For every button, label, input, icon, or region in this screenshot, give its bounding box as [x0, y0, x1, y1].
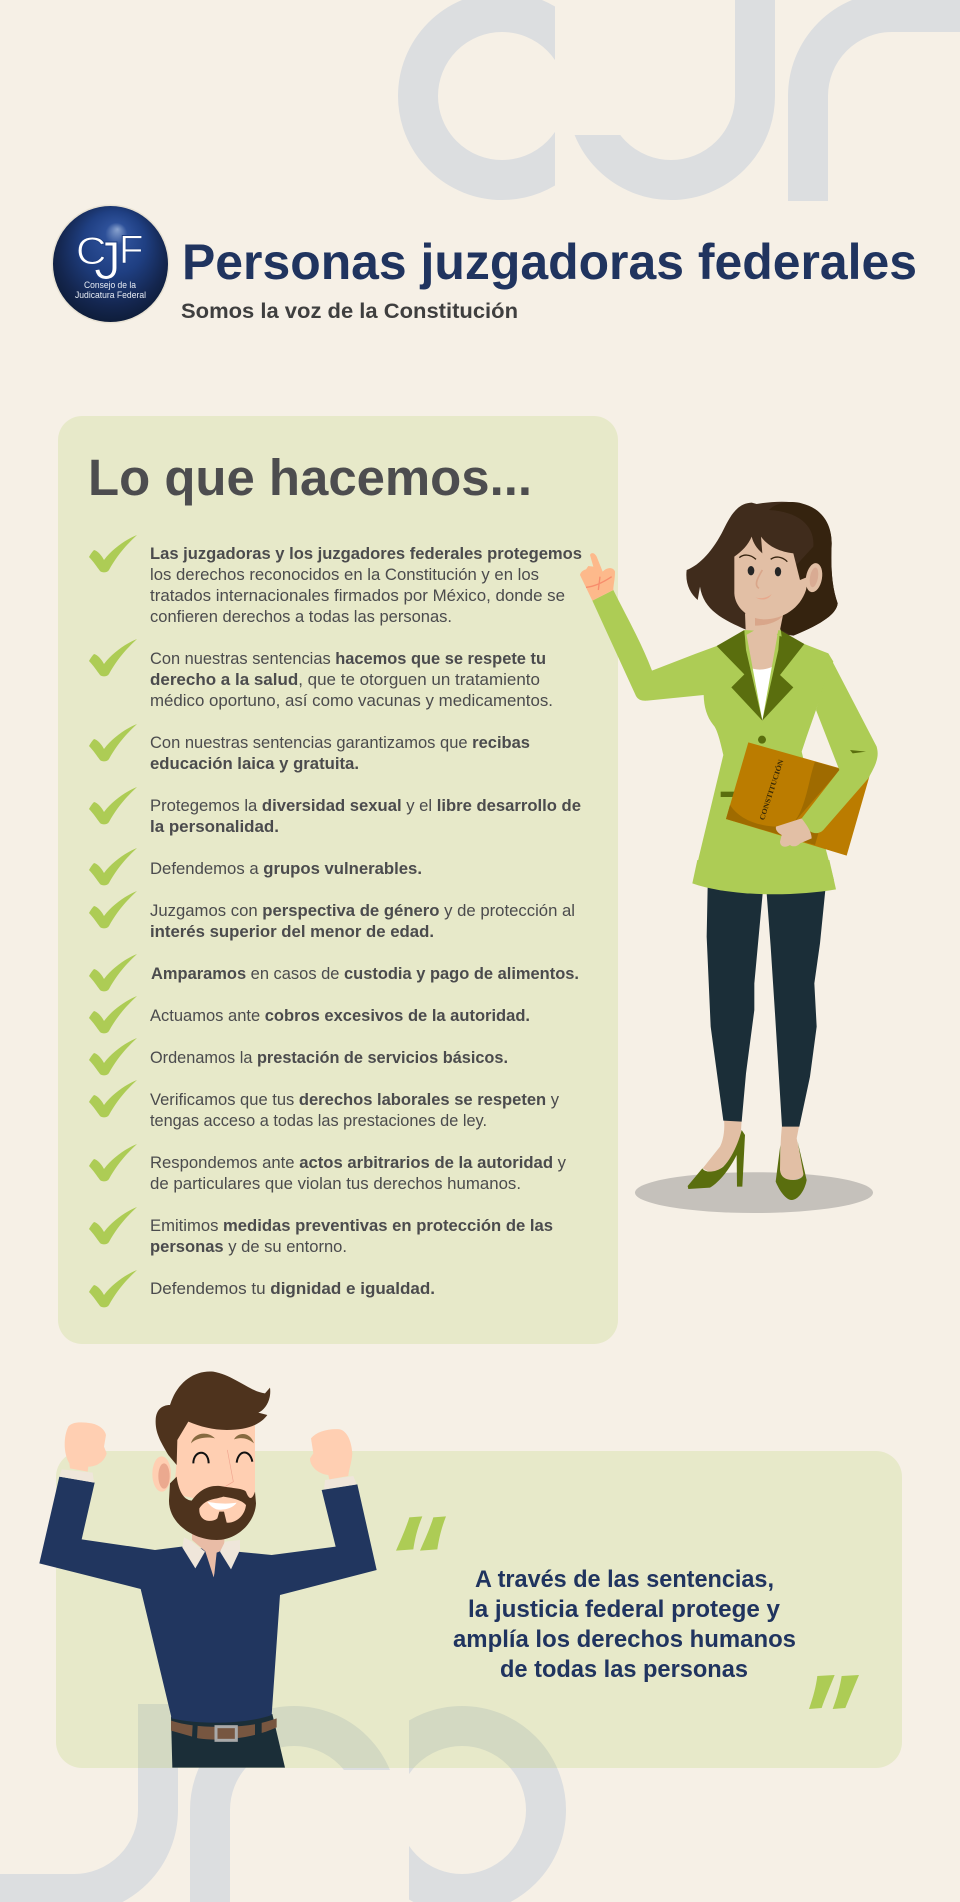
- jacket: [592, 590, 834, 880]
- panel: quote: [56, 1451, 902, 1768]
- quote text: la justicia federal protege y: [468, 1596, 780, 1623]
- list item 2: [89, 639, 553, 710]
- title: Personas juzgadoras federales: [182, 234, 917, 290]
- book: Constitución: CONSTITUCIÓN: [756, 757, 786, 821]
- quote marks: closing: [809, 1675, 859, 1709]
- list item 2: derecho a la salud, que te otorguen un tratamiento: [150, 670, 540, 689]
- upper body: [580, 502, 878, 880]
- list item 1: confieren derechos a todas las personas.: [150, 607, 452, 626]
- list item 3: educación laica y gratuita.: [150, 754, 359, 773]
- hair: [686, 502, 838, 636]
- icon: check: [89, 1144, 137, 1181]
- watermark: CJF letters bottom: [0, 1768, 566, 1902]
- neck: [745, 613, 783, 720]
- list item 1: Las juzgadoras y los juzgadores federales protegemos: [150, 544, 582, 563]
- jacket button and pocket: [758, 736, 766, 744]
- fists: [65, 1422, 107, 1472]
- logo: Consejo de la Judicatura Federal: C: [76, 228, 106, 273]
- belt: [171, 1718, 277, 1740]
- shirt: [748, 664, 777, 720]
- list item 7: Amparamos en casos de custodia y pago de alimentos.: [151, 964, 579, 983]
- icon: check: [89, 996, 137, 1033]
- sweater with raised arms: [39, 1477, 377, 1723]
- list item 12: personas y de su entorno.: [150, 1237, 347, 1256]
- icon: check: [89, 848, 137, 885]
- neck and collar: [192, 1530, 225, 1577]
- list item 2: Con nuestras sentencias hacemos que se respete tu: [150, 649, 546, 668]
- icon: check: [89, 1038, 137, 1075]
- list item 8: Actuamos ante cobros excesivos de la autoridad.: [150, 1006, 530, 1025]
- quote marks: opening: [396, 1516, 446, 1551]
- head: [152, 1372, 270, 1540]
- list item 8: [89, 996, 530, 1033]
- floor shadow: [635, 1172, 873, 1213]
- watermark over quote panel: [138, 1704, 557, 1768]
- pointing hand: [580, 553, 615, 601]
- icon: check: [89, 1080, 137, 1117]
- icon: check: [89, 787, 137, 824]
- list item 7: [89, 954, 579, 991]
- logo: Consejo de la Judicatura Federal: F: [119, 228, 143, 272]
- list item 3: [89, 724, 530, 773]
- list item 12: [89, 1207, 553, 1256]
- icon: check: [89, 1207, 137, 1244]
- panel heading: Lo que hacemos...: [88, 449, 532, 506]
- book: Constitución: [726, 742, 869, 856]
- list item 2: médico oportuno, así como vacunas y medicamentos.: [150, 691, 553, 710]
- subtitle: Somos la voz de la Constitución: [181, 300, 518, 323]
- list item 6: [89, 891, 575, 941]
- logo: Consejo de la Judicatura Federal: Judicatura Federal: [75, 290, 146, 300]
- list item 13: [89, 1270, 435, 1307]
- list item 5: Defendemos a grupos vulnerables.: [150, 859, 422, 878]
- list item 9: Ordenamos la prestación de servicios básicos.: [150, 1048, 508, 1067]
- illustration: bearded man celebrating: [39, 1372, 377, 1768]
- icon: check: [89, 954, 137, 991]
- list item 3: Con nuestras sentencias garantizamos que recibas: [150, 733, 530, 752]
- list item 6: interés superior del menor de edad.: [150, 922, 434, 941]
- cuffs: [59, 1469, 94, 1483]
- list item 11: Respondemos ante actos arbitrarios de la autoridad y: [150, 1153, 566, 1172]
- logo: Consejo de la Judicatura Federal: Consejo de la: [84, 280, 136, 290]
- list item 5: [89, 848, 422, 885]
- icon: check: [89, 724, 137, 761]
- quote text: [453, 1566, 796, 1683]
- list item 4: [89, 787, 581, 836]
- list item 1: tratados internacionales firmados por México, donde se: [150, 586, 565, 605]
- logo: Consejo de la Judicatura Federal: [52, 204, 170, 324]
- list item 11: [89, 1144, 566, 1193]
- hand on book: [776, 818, 812, 847]
- quote text: A través de las sentencias,: [475, 1566, 774, 1593]
- list item 1: [89, 535, 582, 626]
- face: [734, 537, 808, 619]
- icon: check: [89, 891, 137, 928]
- icon: check: [89, 639, 137, 676]
- list item 4: Protegemos la diversidad sexual y el libre desarrollo de: [150, 796, 581, 815]
- icon: check: [89, 535, 137, 572]
- quote text: amplía los derechos humanos: [453, 1626, 796, 1653]
- legs and shoes: [688, 860, 836, 1200]
- supporting arm: [802, 660, 878, 833]
- list item 10: [89, 1080, 559, 1130]
- list item 10: tengas acceso a todas las prestaciones de ley.: [150, 1111, 487, 1130]
- trousers: [171, 1714, 285, 1768]
- list item 1: los derechos reconocidos en la Constitución y en los: [150, 565, 539, 584]
- list item 9: [89, 1038, 508, 1075]
- lapels: [717, 630, 762, 721]
- list item 12: Emitimos medidas preventivas en protección de las: [150, 1216, 553, 1235]
- watermark: CJF letters top: [418, 0, 960, 201]
- list item 11: de particulares que violan tus derechos humanos.: [150, 1174, 521, 1193]
- quote text: de todas las personas: [500, 1656, 748, 1683]
- list item 13: Defendemos tu dignidad e igualdad.: [150, 1279, 435, 1298]
- logo: Consejo de la Judicatura Federal: J: [94, 231, 121, 291]
- list item 10: Verificamos que tus derechos laborales se respeten y: [150, 1090, 559, 1109]
- illustration: woman holding the Constitution: [580, 502, 878, 1213]
- list item 6: Juzgamos con perspectiva de género y de protección al: [150, 901, 575, 920]
- panel: lo que hacemos: [58, 416, 618, 1344]
- icon: check: [89, 1270, 137, 1307]
- list item 4: la personalidad.: [150, 817, 279, 836]
